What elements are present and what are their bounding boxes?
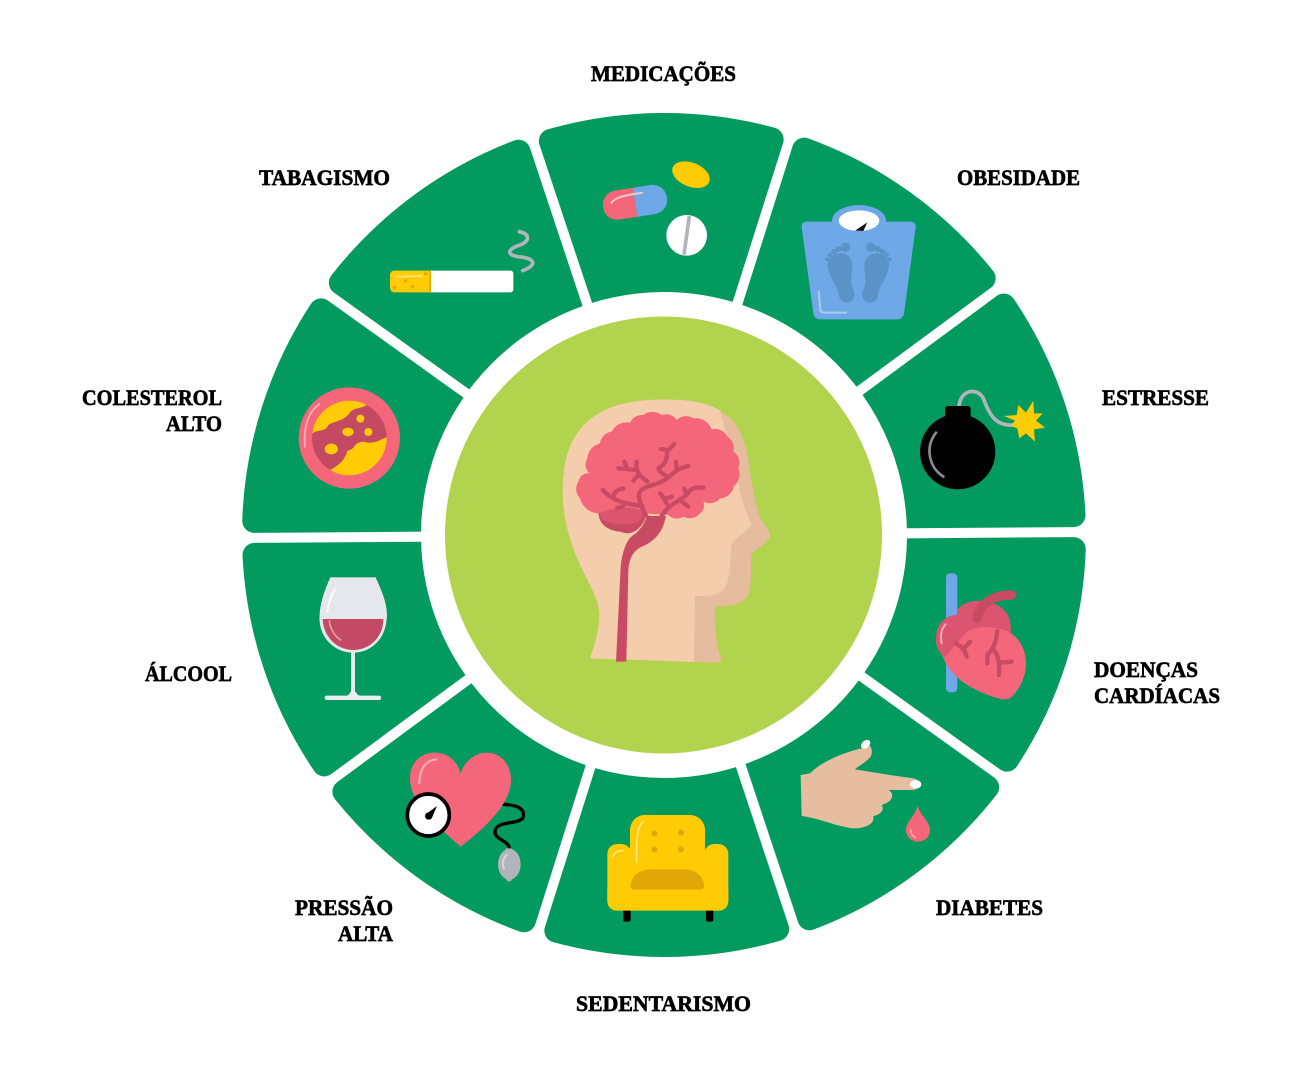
icon: wine glass — [320, 578, 387, 700]
icon: heart with artery — [936, 573, 1026, 699]
label: medicações: MEDICAÇÕES — [591, 61, 736, 86]
icon: artery with cholesterol — [299, 387, 400, 489]
segment: medicações — [591, 61, 736, 256]
label: tabagismo: TABAGISMO — [259, 165, 390, 190]
label: diabetes: DIABETES — [936, 895, 1043, 920]
label: colesterol alto: COLESTEROL — [82, 385, 222, 410]
label: colesterol alto: ALTO — [166, 411, 222, 436]
label: estresse: ESTRESSE — [1102, 385, 1209, 410]
label: doenças cardíacas: DOENÇAS — [1094, 657, 1198, 682]
label: álcool: ÁLCOOL — [145, 661, 232, 686]
label: pressão alta: ALTA — [338, 921, 393, 946]
segment: tabagismo — [259, 165, 533, 292]
icon: head with brain — [563, 399, 770, 663]
label: pressão alta: PRESSÃO — [295, 895, 393, 920]
wheel segments — [225, 112, 1103, 958]
label: obesidade: OBESIDADE — [957, 165, 1080, 190]
segment: doenças cardíacas — [936, 573, 1220, 708]
segment: álcool — [145, 578, 387, 700]
segment: diabetes — [801, 738, 1043, 920]
segment: pressão alta — [295, 753, 523, 946]
label: sedentarismo: SEDENTARISMO — [576, 991, 751, 1016]
icon: pills — [601, 156, 714, 256]
label: colesterol alto — [82, 385, 222, 436]
center circle — [445, 316, 882, 754]
icon: cigarette — [390, 232, 533, 292]
label: pressão alta — [295, 895, 393, 946]
icon: weighing scale — [802, 205, 916, 319]
icon: finger and blood drop — [801, 738, 930, 842]
icon: heart with blood pressure gauge — [407, 753, 523, 881]
label: doenças cardíacas — [1094, 657, 1220, 708]
segment: colesterol alto — [82, 385, 400, 489]
label: doenças cardíacas: CARDÍACAS — [1094, 683, 1220, 708]
icon: bomb — [920, 391, 1045, 489]
segment: estresse — [920, 385, 1209, 489]
infographic: risk factor wheel — [82, 61, 1220, 1012]
segment: obesidade — [802, 165, 1080, 319]
icon: armchair — [607, 815, 728, 922]
segment: sedentarismo — [576, 815, 751, 1016]
